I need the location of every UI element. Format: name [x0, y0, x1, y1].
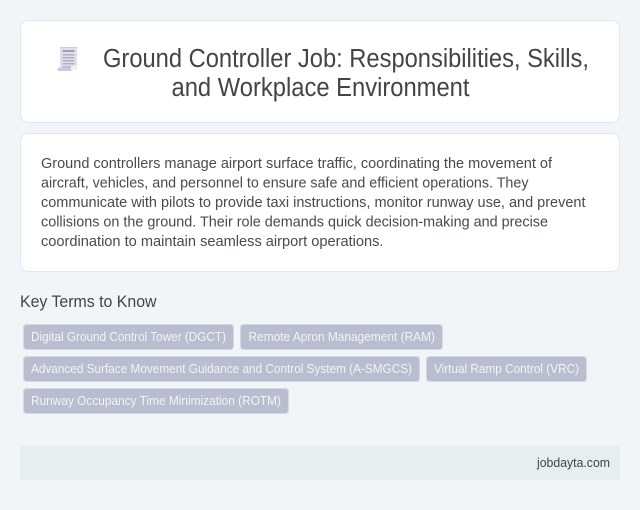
chip: A-SMGCS: Advanced Surface Movement Guidance and Control System (A-SMGCS)	[31, 362, 412, 376]
chip: RAM	[240, 324, 442, 350]
key term chips	[24, 324, 586, 414]
title: and Workplace Environment	[172, 74, 470, 102]
title	[103, 45, 589, 102]
chip: VRC	[426, 356, 586, 382]
description text: coordination to maintain seamless airport operations.	[41, 234, 384, 250]
footer bar	[20, 446, 620, 480]
panel: title card	[20, 20, 620, 122]
icon: document scroll	[58, 47, 77, 71]
chip: ROTM	[24, 388, 288, 414]
heading: key terms: Key Terms to Know	[20, 293, 157, 311]
chip: A-SMGCS	[24, 356, 420, 382]
panel: description	[20, 134, 620, 272]
description text: aircraft, vehicles, and personnel to ensure safe and efficient operations. They	[41, 176, 529, 192]
description text: Ground controllers manage airport surface traffic, coordinating the movement of	[41, 156, 553, 172]
chip: VRC: Virtual Ramp Control (VRC)	[434, 362, 579, 376]
description text: collisions on the ground. Their role demands quick decision-making and precise	[41, 214, 548, 230]
description text: communicate with pilots to provide taxi instructions, monitor runway use, and prevent	[41, 195, 586, 211]
chip: ROTM: Runway Occupancy Time Minimization (ROTM)	[31, 394, 281, 408]
footer text: jobdayta.com	[536, 456, 610, 470]
chip: RAM: Remote Apron Management (RAM)	[248, 330, 435, 344]
chip: DGCT	[24, 324, 234, 350]
chip: DGCT: Digital Ground Control Tower (DGCT)	[31, 330, 226, 344]
title: Ground Controller Job: Responsibilities, Skills,	[103, 45, 589, 73]
description text	[41, 156, 586, 250]
